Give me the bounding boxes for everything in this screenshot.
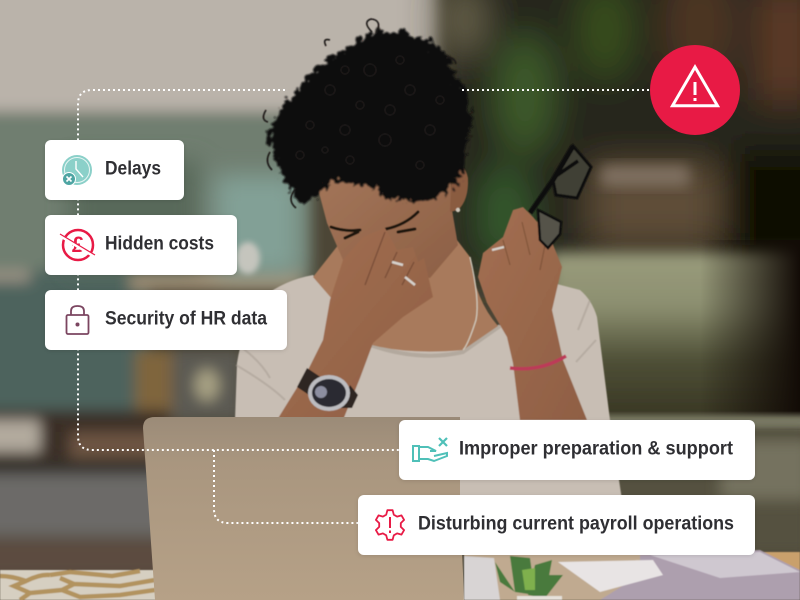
- label: security of HR data: Security of HR data: [105, 308, 267, 330]
- label: hidden costs: Hidden costs: [105, 234, 214, 254]
- icon: crossed pound: £: [72, 232, 85, 257]
- watch: [297, 368, 358, 411]
- table pattern: [0, 570, 160, 600]
- desk items: [464, 550, 800, 600]
- label: disturbing current payroll operations: Disturbing current payroll operations: [418, 514, 734, 534]
- icon: padlock: [66, 306, 88, 334]
- right arm and hand: [478, 207, 587, 420]
- card: hidden costs: [45, 215, 237, 275]
- dotted connector lines: [78, 90, 650, 523]
- icon: open hand with cross: [413, 438, 447, 461]
- laptop: [143, 417, 464, 600]
- alert badge: [650, 45, 740, 135]
- plant: [495, 556, 563, 600]
- left hand: [277, 228, 433, 420]
- person: [235, 19, 622, 500]
- chest and neck: [313, 230, 498, 352]
- eyebrows and eyes: [331, 212, 418, 238]
- icon: warning triangle: [672, 67, 718, 106]
- card: improper preparation and support: [399, 420, 755, 480]
- card: delays: [45, 140, 184, 200]
- card: security of HR data: [45, 290, 287, 350]
- shirt: [235, 275, 622, 500]
- label: delays: Delays: [105, 158, 161, 180]
- rings: [392, 262, 415, 285]
- label: improper preparation and support: Improper preparation & support: [459, 438, 734, 460]
- ear: [450, 166, 468, 212]
- icon: crossed pound: [60, 230, 95, 260]
- glasses: [530, 146, 591, 248]
- papers: [600, 550, 800, 600]
- bracelet: [510, 356, 566, 369]
- card: disturbing current payroll operations: [358, 495, 755, 555]
- hair: [263, 19, 468, 208]
- icon: gear with exclamation: [376, 510, 404, 540]
- icon: clock with cross: [62, 155, 92, 186]
- face: [317, 160, 458, 278]
